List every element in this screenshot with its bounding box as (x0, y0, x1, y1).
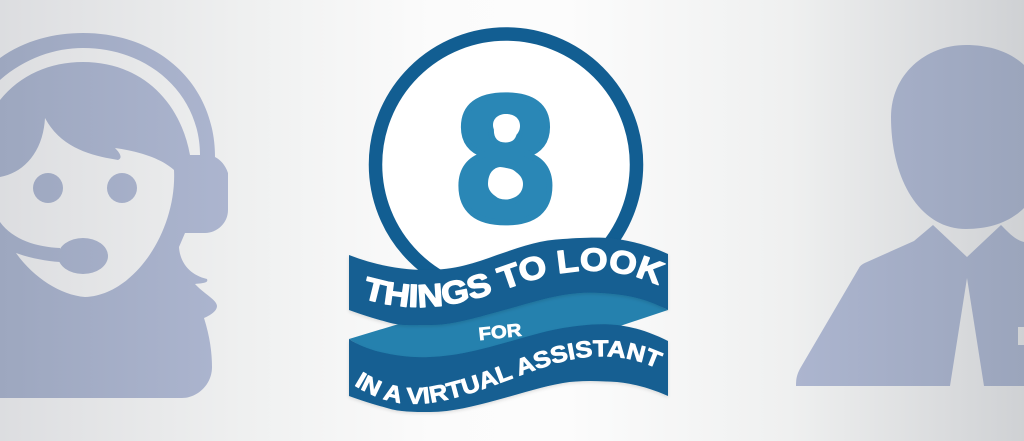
icon: man in suit (796, 45, 1024, 386)
number 8: 8 (452, 65, 559, 261)
ribbon banner (348, 238, 669, 414)
ribbon: top band (349, 238, 668, 325)
ribbon: lighter middle fold (349, 285, 668, 365)
ribbon text: FOR: FOR (478, 320, 522, 344)
icon: woman's eyes (33, 173, 137, 203)
badge circle (376, 34, 636, 295)
ribbon text: THINGS TO LOOK: THINGS TO LOOK (366, 248, 666, 308)
ribbon text: IN A VIRTUAL ASSISTANT: IN A VIRTUAL ASSISTANT (354, 340, 664, 404)
icon: headset microphone (58, 238, 108, 274)
ribbon: bottom band (349, 324, 668, 412)
icon: woman with headset (0, 33, 228, 398)
number 8: counters (488, 114, 523, 199)
